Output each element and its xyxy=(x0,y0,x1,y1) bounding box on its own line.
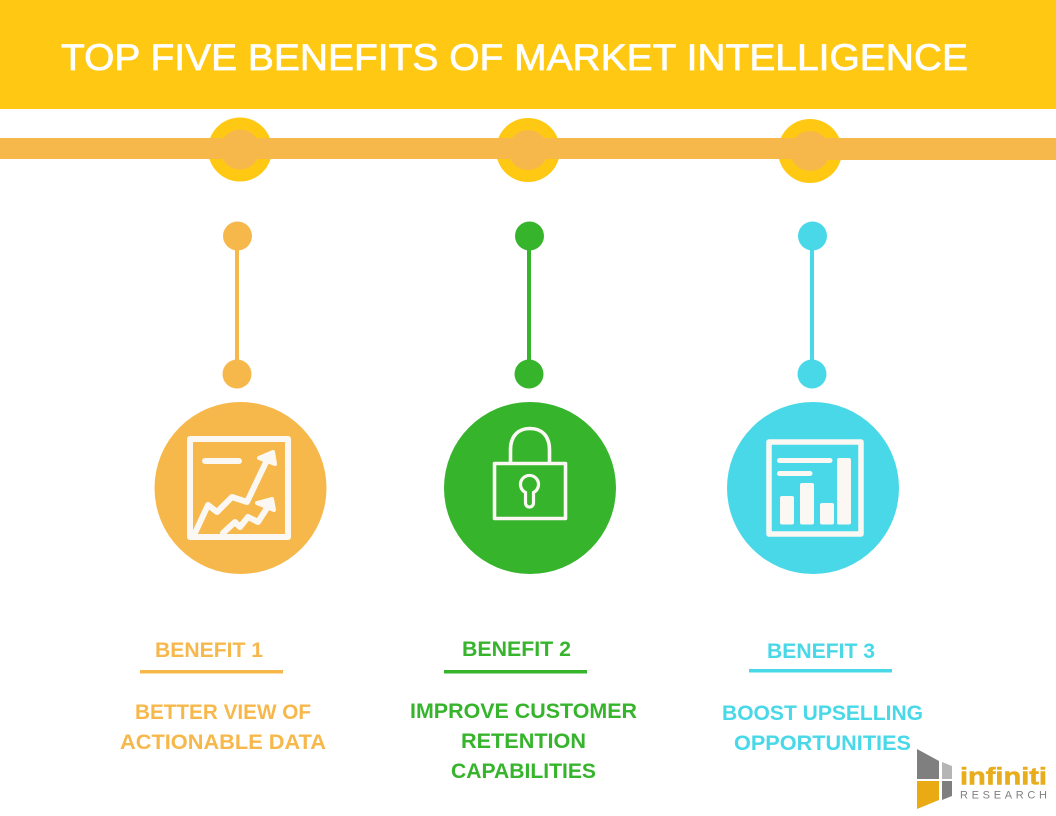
icon: growth chart xyxy=(154,402,326,574)
connector 3 xyxy=(798,222,827,388)
benefit 2 text block xyxy=(410,638,637,783)
icon: bar report xyxy=(727,402,899,574)
logo wordmark: infiniti xyxy=(960,764,1047,790)
benefit 3 heading: BENEFIT 3 xyxy=(767,640,875,663)
icon: padlock xyxy=(444,402,616,574)
title: TOP FIVE BENEFITS OF MARKET INTELLIGENCE xyxy=(61,36,968,78)
connector 1 xyxy=(222,222,252,388)
benefit 1 text block xyxy=(120,639,326,754)
logo subtitle: RESEARCH xyxy=(960,790,1047,802)
benefit 2 description: CAPABILITIES xyxy=(451,760,596,783)
title banner xyxy=(0,0,1056,109)
benefit 1 description xyxy=(120,701,326,754)
benefit 2 heading: BENEFIT 2 xyxy=(462,638,571,661)
benefit 3 description: OPPORTUNITIES xyxy=(734,732,911,755)
connector 2 xyxy=(514,222,544,388)
benefit 1 heading: BENEFIT 1 xyxy=(155,639,263,662)
benefit 3 description: BOOST UPSELLING xyxy=(722,702,923,725)
benefit 3 text block xyxy=(722,640,923,755)
logo: Infiniti Research xyxy=(917,749,1047,809)
benefit 3 description xyxy=(722,702,923,755)
benefit 2 description: RETENTION xyxy=(461,730,586,753)
benefit 2 description: IMPROVE CUSTOMER xyxy=(410,700,637,723)
benefit 1 description: ACTIONABLE DATA xyxy=(120,731,326,754)
benefit 1 description: BETTER VIEW OF xyxy=(135,701,311,724)
benefit 2 description xyxy=(410,700,637,783)
timeline bar with nodes xyxy=(0,118,1056,183)
